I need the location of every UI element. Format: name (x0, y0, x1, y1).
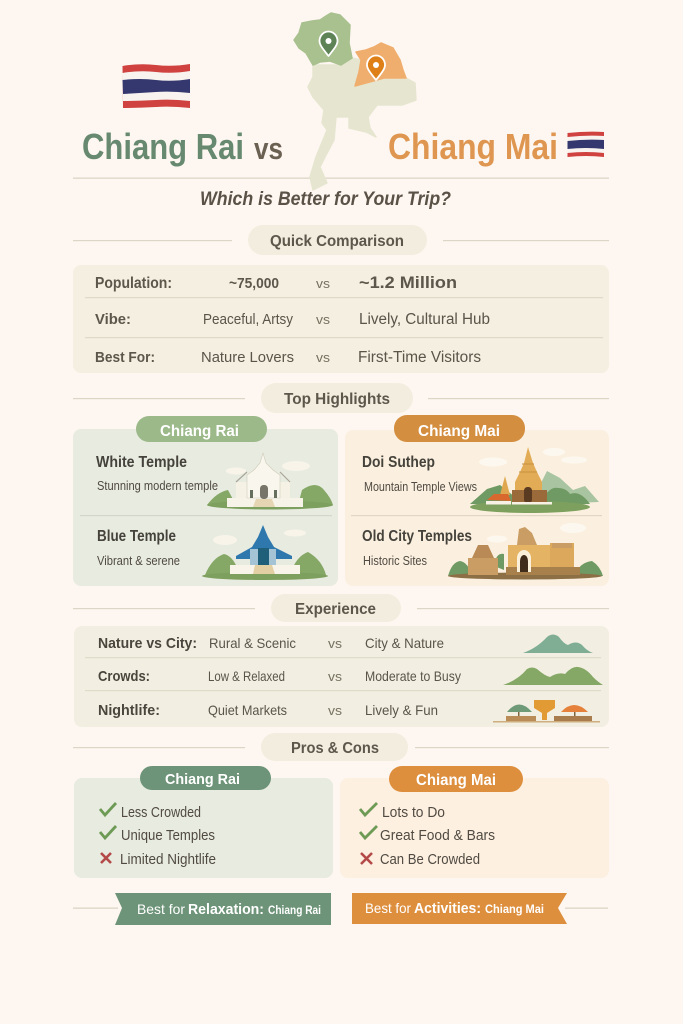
row: crowds: Moderate to Busy (365, 668, 461, 684)
banner: best for relaxation: Best for (137, 901, 185, 917)
item: White Temple: White Temple (96, 454, 187, 471)
header rule (73, 178, 609, 179)
row: best for: Best For: (95, 349, 155, 366)
row: nightlife: Lively & Fun (365, 702, 438, 718)
row: crowds (98, 668, 461, 685)
item: Old City Temples (362, 528, 472, 568)
panel: quick comparison table (73, 265, 609, 373)
row: vibe (95, 311, 490, 328)
pro: Unique Temples (100, 826, 215, 844)
row: nightlife: Nightlife: (98, 702, 160, 719)
row: population: Population: (95, 275, 172, 292)
section heading: Top Highlights: Top Highlights (284, 391, 390, 408)
panel: Chiang Rai pros and cons (74, 766, 333, 878)
row: vibe: Peaceful, Artsy (203, 312, 294, 328)
banner: best for activities: Activities: (414, 900, 481, 917)
item: White Temple (96, 454, 218, 493)
pill: Chiang Rai (140, 766, 271, 790)
row: vibe: Vibe: (95, 311, 131, 328)
pro: Great Food & Bars: Great Food & Bars (380, 827, 495, 844)
panel: Chiang Mai highlights (345, 415, 609, 586)
row: population: vs (316, 276, 331, 291)
pill: Chiang Mai (394, 415, 525, 442)
banner: best for relaxation: Chiang Rai (268, 903, 321, 917)
icon: market stalls (493, 700, 600, 722)
illustration: Doi Suthep (470, 447, 599, 513)
section heading: Experience (73, 594, 609, 622)
item: Blue Temple: Blue Temple (97, 528, 176, 545)
row: nightlife: vs (328, 703, 343, 718)
section heading: Quick Comparison: Quick Comparison (270, 233, 404, 250)
title: vs: vs (254, 131, 283, 166)
row: nature vs city: vs (328, 636, 343, 651)
item: Doi Suthep: Mountain Temple Views (364, 480, 477, 494)
section heading: Pros & Cons (73, 733, 609, 761)
item: Blue Temple: Vibrant & serene (97, 554, 180, 568)
row: best for: Nature Lovers (201, 349, 294, 366)
row: population: ~75,000 (229, 275, 279, 292)
title: Chiang Mai: Chiang Mai (388, 126, 558, 167)
illustration: Old City Temples (448, 523, 603, 580)
pro: Unique Temples: Unique Temples (121, 827, 215, 844)
Thai flag large (122, 64, 190, 108)
pro: Lots to Do (360, 803, 445, 821)
map pin: orange (367, 56, 385, 80)
item: Doi Suthep (362, 454, 477, 494)
banner: best for relaxation (73, 893, 331, 925)
con: Limited Nightlife: Limited Nightlife (120, 851, 216, 868)
subtitle: Which is Better for Your Trip? (200, 189, 451, 210)
illustration: Blue Temple (202, 525, 328, 580)
row: crowds: vs (328, 669, 343, 684)
banner: best for activities: Chiang Mai (485, 902, 544, 916)
section heading: Pros & Cons: Pros & Cons (291, 740, 379, 757)
row: nature vs city: Rural & Scenic (209, 635, 296, 651)
row: population: ~1.2 Million (359, 273, 457, 292)
pill: Chiang Rai (136, 416, 267, 442)
item: Blue Temple (97, 528, 180, 568)
row: nature vs city: Nature vs City: (98, 635, 197, 652)
row: nature vs city (98, 635, 444, 652)
panel: Chiang Rai highlights (73, 416, 338, 586)
section heading: Top Highlights (73, 383, 609, 413)
row: nightlife (98, 702, 438, 719)
banner: best for activities (352, 893, 608, 924)
pill: Chiang Rai: Chiang Rai (165, 771, 240, 788)
illustration: White Temple (207, 453, 333, 510)
item: Old City Temples: Historic Sites (363, 554, 427, 568)
row: vibe: vs (316, 312, 331, 327)
pill: Chiang Mai: Chiang Mai (418, 423, 500, 440)
row: best for (95, 349, 481, 366)
row: nature vs city: City & Nature (365, 635, 444, 651)
map of Thailand (294, 13, 416, 190)
panel: Chiang Mai pros and cons (340, 766, 609, 878)
pro: Less Crowded (100, 803, 201, 821)
row: population (95, 273, 457, 292)
pro: Less Crowded: Less Crowded (121, 804, 201, 821)
pill: Chiang Mai (389, 766, 523, 792)
section heading: Quick Comparison (73, 225, 609, 255)
region: Chiang Mai (355, 43, 406, 86)
row: vibe: Lively, Cultural Hub (359, 311, 490, 328)
item: White Temple: Stunning modern temple (97, 479, 218, 493)
pill: Chiang Mai: Chiang Mai (416, 772, 496, 789)
region: Chiang Rai (294, 13, 352, 65)
row: nightlife: Quiet Markets (208, 702, 287, 718)
banner: best for activities: Best for (365, 900, 411, 916)
title: Chiang Rai: Chiang Rai (82, 126, 244, 167)
panel: experience table (74, 626, 609, 727)
icon: mountains (523, 634, 593, 653)
pill: Chiang Rai: Chiang Rai (160, 423, 239, 440)
map pin: green (320, 32, 338, 56)
row: crowds: Crowds: (98, 668, 150, 685)
row: best for: First-Time Visitors (358, 349, 481, 366)
banner: best for relaxation: Relaxation: (188, 901, 264, 918)
item: Doi Suthep: Doi Suthep (362, 454, 435, 471)
item: Old City Temples: Old City Temples (362, 528, 472, 545)
con: Can Be Crowded: Can Be Crowded (380, 851, 480, 868)
pro: Lots to Do: Lots to Do (382, 804, 445, 821)
section heading: Experience: Experience (295, 601, 376, 618)
row: best for: vs (316, 350, 331, 365)
row: crowds: Low & Relaxed (208, 668, 285, 684)
icon: green hills (503, 667, 603, 685)
Thai flag small (568, 132, 604, 157)
